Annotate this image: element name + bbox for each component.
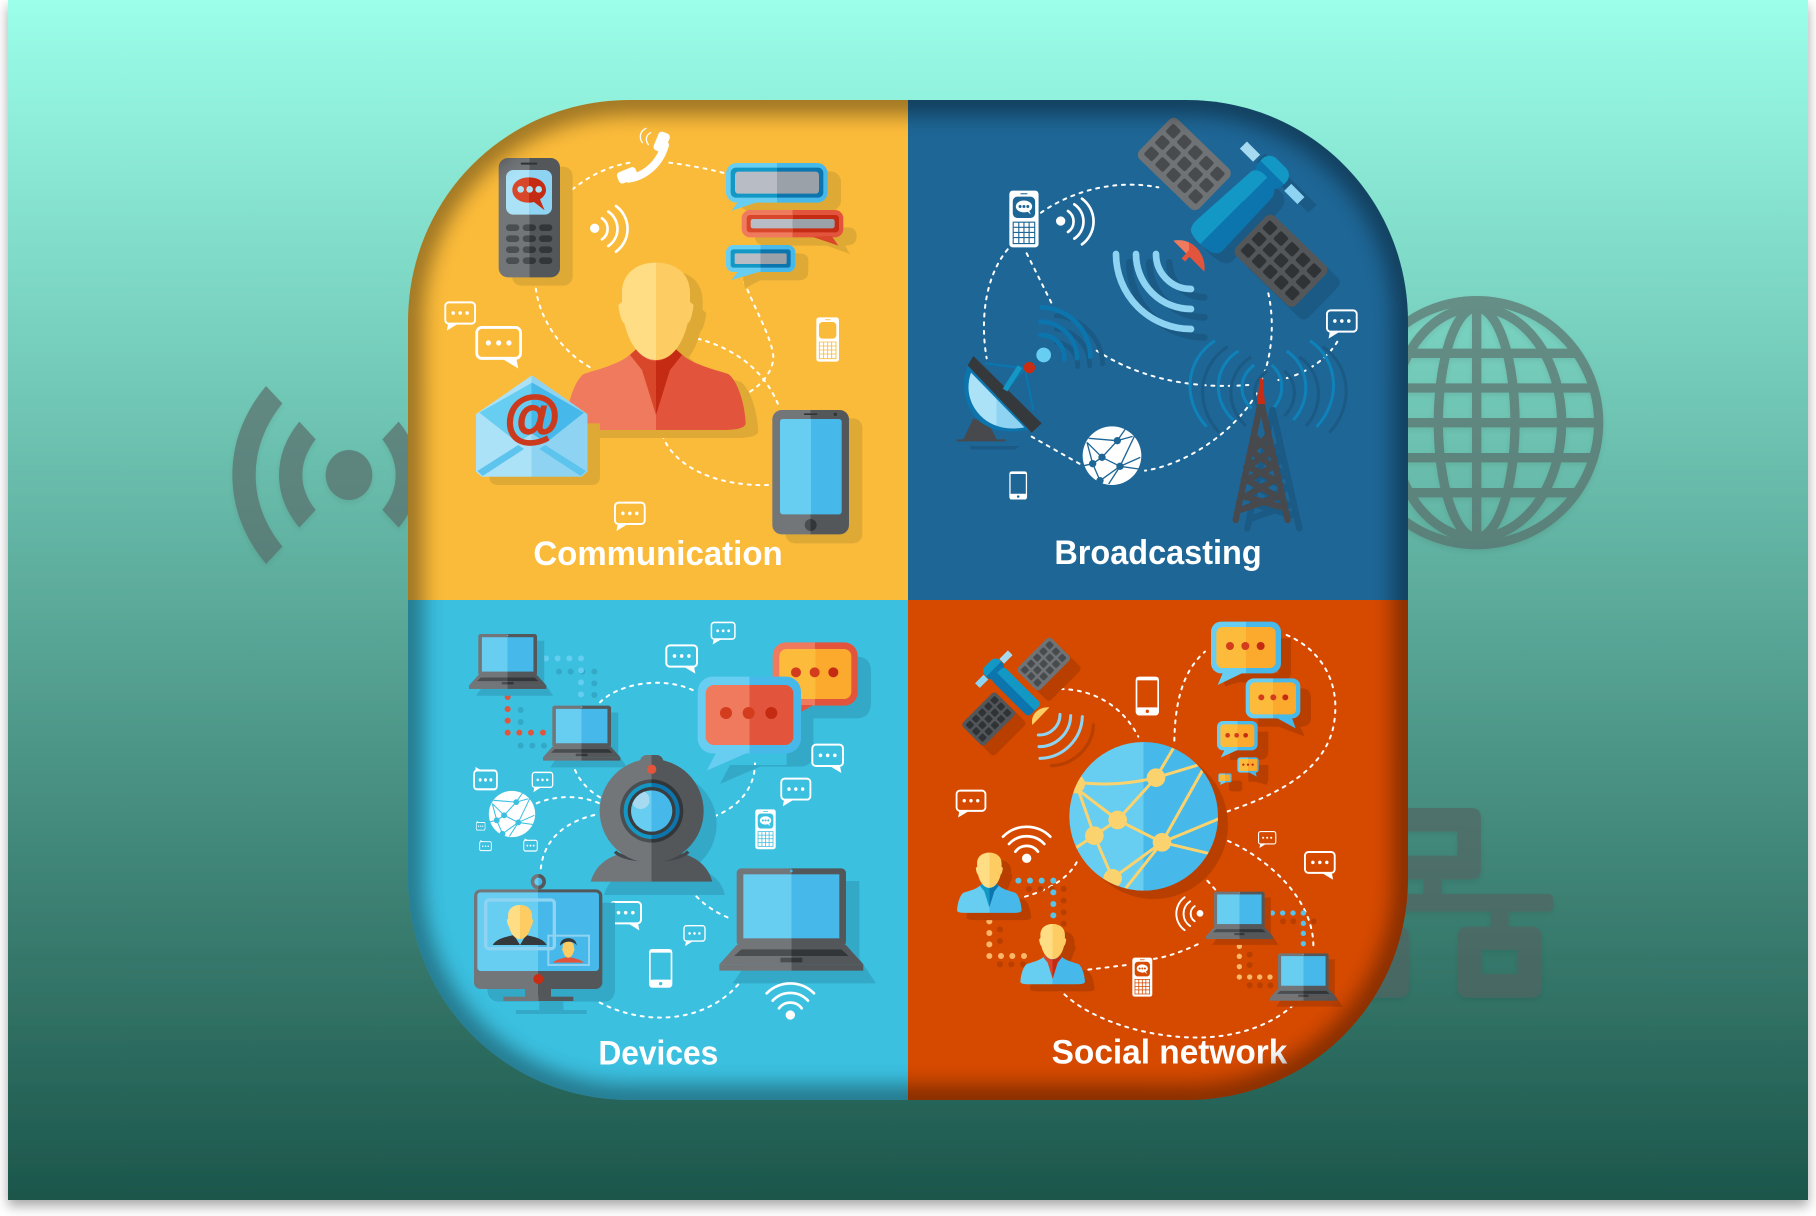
icon: dotted link between laptops [505, 655, 597, 749]
icon: wifi [1003, 827, 1050, 863]
icon: dish waves [1040, 307, 1103, 367]
icon: network globe [1083, 426, 1141, 485]
heading: Communication: Communication [533, 535, 783, 573]
icon: phone with chat [755, 809, 776, 849]
icon: email envelope: @ [504, 385, 560, 449]
heading: Broadcasting: Broadcasting [1054, 534, 1262, 572]
icon: red chat bubble [742, 210, 857, 254]
icon: signal waves [590, 206, 628, 252]
icon: satellite dish [957, 348, 1051, 449]
icon: tower radio waves [1190, 341, 1346, 433]
icon: wifi [767, 983, 814, 1020]
icon: outline smartphone [1136, 677, 1158, 715]
icon: broadcast tower [1236, 378, 1299, 528]
connectors [535, 163, 778, 485]
connectors [984, 185, 1338, 471]
icon: laptop top left [469, 634, 553, 696]
icon: mobile phone with chat [499, 158, 573, 286]
icon: white chat bubble [1327, 310, 1357, 339]
panel: Communication [408, 100, 908, 600]
icon: laptop lower [1270, 953, 1343, 1007]
icon: person center [1020, 924, 1095, 991]
panel: Social network [908, 600, 1408, 1100]
icon: white phone with chat [1009, 191, 1039, 247]
icon: satellite [961, 636, 1082, 757]
icon: white chat bubbles [445, 302, 645, 531]
rounded tile with four panels [408, 100, 1408, 1100]
icon: outline smartphone [650, 950, 672, 988]
icon: background network diagram [1310, 808, 1553, 998]
icon: video conference monitor [474, 874, 615, 1014]
icon: person [566, 263, 758, 438]
icon: satellite [1135, 115, 1343, 322]
icon: telephone handset [616, 128, 671, 185]
icon: background signal waves [232, 386, 419, 564]
icon: laptop middle [543, 706, 627, 767]
icon: satellite signal waves [1116, 254, 1204, 337]
icon: white chat bubbles [474, 622, 843, 946]
icon: world globe network [1066, 742, 1228, 899]
icon: tablet [772, 410, 862, 543]
icon: signal waves [1176, 897, 1203, 930]
icon: orange chat bubbles [1211, 622, 1311, 791]
icon: person left [957, 853, 1031, 920]
panel: Broadcasting [908, 100, 1408, 600]
icon: outline smartphone [1010, 472, 1027, 500]
icon: network globe [489, 791, 535, 837]
icon: email envelope [476, 375, 600, 485]
icon: small blue chat bubble [726, 245, 808, 288]
icon: webcam [591, 755, 725, 895]
connectors [537, 683, 755, 1018]
icon: laptop upper [1206, 892, 1279, 945]
icon: satellite signal waves [1038, 714, 1093, 766]
icon: phone with chat [1132, 958, 1152, 997]
icon: small white phone [816, 317, 839, 362]
inner shadow of tile [408, 100, 1408, 1100]
icon: chat bubbles large [698, 642, 871, 784]
panel: Devices [408, 600, 908, 1100]
icon: background globe [1355, 301, 1599, 545]
icon: dotted links [986, 878, 1317, 988]
connectors [1025, 635, 1335, 1038]
icon: signal waves [1056, 199, 1094, 244]
heading: Devices: Devices [598, 1034, 718, 1072]
icon: blue chat bubble large [726, 163, 841, 211]
icon: large laptop [719, 868, 876, 983]
heading: Social network: Social network [1052, 1033, 1288, 1071]
icon: white chat bubbles [957, 791, 1335, 880]
